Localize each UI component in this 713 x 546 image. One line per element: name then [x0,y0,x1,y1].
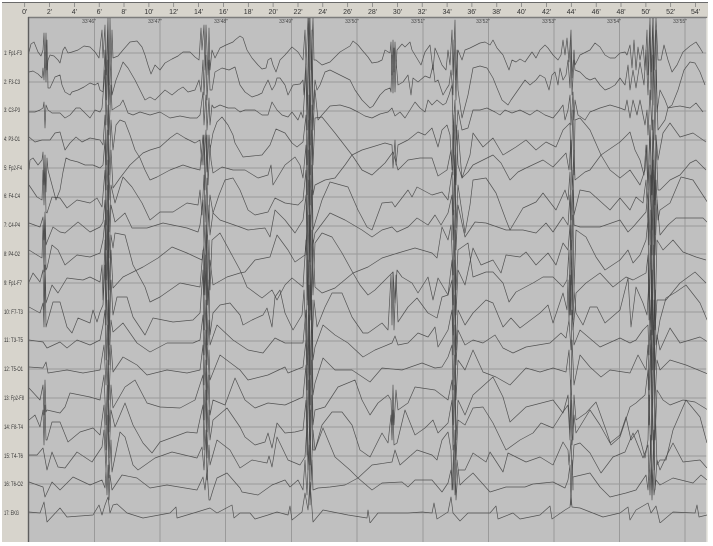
time stamps: 33'53" [542,19,556,25]
channel labels: 5: Fp2-F4 [4,165,22,172]
time stamps: 33'49" [279,19,293,25]
time ruler: 12' [169,9,178,16]
trace 16: T6-O2 [29,432,707,505]
channel labels: 15: T4-T6 [4,453,23,460]
trace 5: Fp2-F4 [29,120,706,205]
time ruler: 36' [467,9,476,16]
time stamps: 33'46" [82,19,96,25]
time stamps: 33'50" [345,19,359,25]
channel labels: 14: F8-T4 [4,424,23,431]
time ruler: 52' [666,9,675,16]
trace 7: C4-P4 [29,170,708,262]
channel labels: 6: F4-C4 [4,193,20,200]
trace 4: P3-O1 [29,95,706,205]
time ruler: 26' [343,9,352,16]
time ruler: 50' [641,9,650,16]
channel labels: 2: F3-C3 [4,79,20,86]
time ruler: 44' [567,9,576,16]
trace 8: P4-O2 [29,200,706,320]
time ruler: 2' [47,9,52,16]
channel labels: 3: C3-P3 [4,107,20,114]
time ruler: 32' [418,9,427,16]
time stamps: 33'51" [411,19,425,25]
trace 9: Fp1-F7 [29,210,706,335]
time ruler: 30' [393,9,402,16]
channel labels: 9: Fp1-F7 [4,280,22,287]
time ruler: 4' [72,9,77,16]
time ruler: 38' [492,9,501,16]
time ruler: 24' [318,9,327,16]
time ruler [22,3,700,16]
time stamps: 33'52" [476,19,490,25]
trace 14: F8-T4 [29,380,707,470]
channel labels: 13: Fp2-F8 [4,395,24,402]
trace 15: T4-T6 [29,410,707,500]
time ruler: 0' [22,9,27,16]
channel labels: 7: C4-P4 [4,222,20,229]
time ruler: 28' [368,9,377,16]
time ruler: 16' [219,9,228,16]
time ruler: 10' [144,9,153,16]
time ruler: 8' [121,9,127,16]
channel labels: 12: T5-O1 [4,366,23,373]
trace 3: C3-P3 [29,45,703,145]
channel labels [4,50,24,517]
trace 1: Fp1-F3 [29,18,703,85]
channel labels: 10: F7-T3 [4,309,23,316]
time stamps: 33'55" [673,19,687,25]
trace 13: Fp2-F8 [29,345,708,445]
trace 2: F3-C3 [29,18,705,120]
time stamps: 33'54" [607,19,621,25]
time ruler: 22' [293,9,303,16]
time ruler: 48' [616,9,626,16]
time stamps [82,19,687,25]
channel labels: 1: Fp1-F3 [4,50,22,57]
channel labels: 4: P3-O1 [4,136,20,143]
time ruler: 34' [443,9,452,16]
time ruler: 6' [97,9,102,16]
time ruler: 40' [517,9,526,16]
time ruler: 14' [194,9,203,16]
trace 17: EKG [29,482,707,523]
trace 12: T5-O1 [29,315,708,405]
channel labels: 11: T3-T5 [4,337,23,344]
channel labels: 16: T6-O2 [4,481,23,488]
time ruler: 20' [269,9,278,16]
trace 11: T3-T5 [29,285,708,375]
trace 10: F7-T3 [29,250,708,355]
time ruler: 42' [542,9,551,16]
trace 6: F4-C4 [29,150,708,240]
time ruler: 18' [244,9,253,16]
time ruler: 46' [592,9,601,16]
channel labels: 8: P4-O2 [4,251,20,258]
time ruler: 54' [691,9,700,16]
time stamps: 33'48" [214,19,228,25]
channel labels: 17: EKG [4,510,19,517]
time stamps: 33'47" [148,19,162,25]
